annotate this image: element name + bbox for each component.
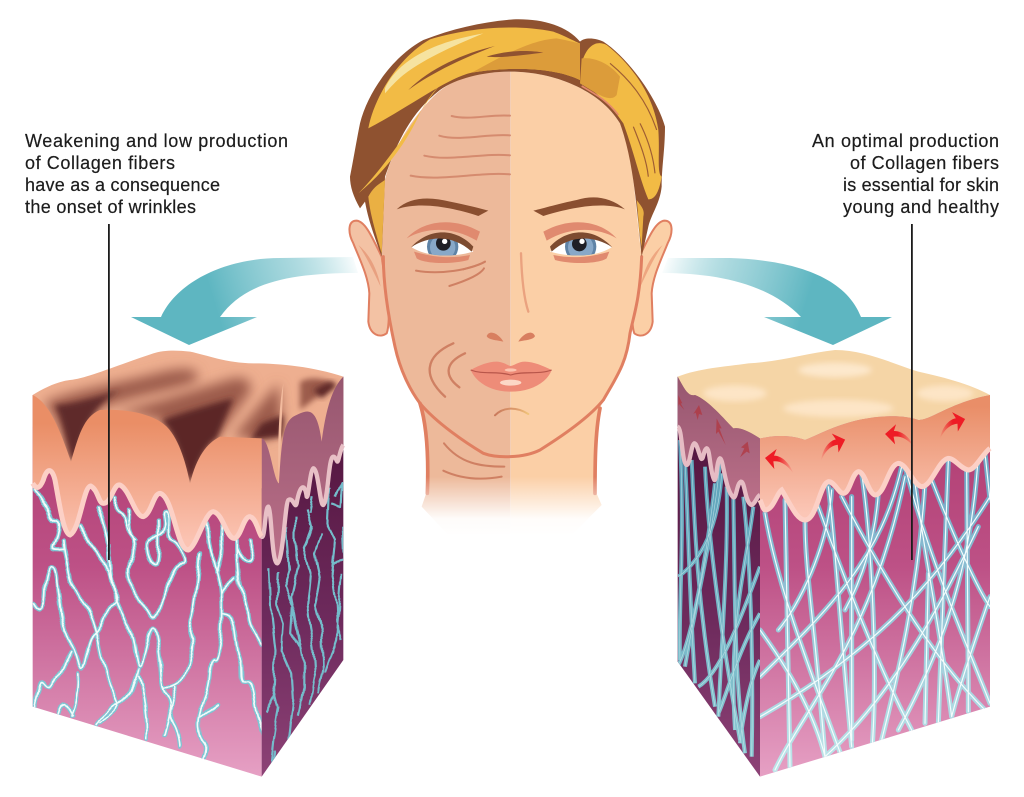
portrait: half aged, half young face <box>349 19 672 537</box>
under-eye and cheek wrinkles <box>416 262 504 479</box>
straight collagen fibers, side face <box>678 440 760 757</box>
side ridge wave <box>678 427 760 505</box>
text block: left caption <box>25 131 288 217</box>
epidermis, side face <box>262 377 343 563</box>
left ear <box>349 221 389 336</box>
face skin, young half <box>511 72 642 533</box>
nostrils <box>487 333 535 342</box>
skin surface with wrinkle folds <box>32 350 344 488</box>
epidermis, front face <box>760 395 990 520</box>
smooth skin surface <box>678 350 990 440</box>
text block: right caption: An optimal production <box>812 131 999 151</box>
right eye <box>543 222 617 263</box>
front dermis <box>760 395 990 777</box>
chin mark <box>495 409 528 415</box>
arrow: left, face to wrinkled skin <box>131 257 358 345</box>
text block: left caption: have as a consequence <box>25 175 220 195</box>
text block: right caption: young and healthy <box>843 197 999 217</box>
straight collagen fibers, front face <box>760 453 990 770</box>
front ridge wave <box>33 471 262 550</box>
epidermis, front face <box>33 395 262 550</box>
red arrows, front <box>765 410 968 473</box>
nose line <box>521 253 528 312</box>
forehead wrinkles <box>411 115 510 178</box>
front dermis <box>33 395 262 777</box>
text block: left caption: of Collagen fibers <box>25 153 175 173</box>
hair <box>350 19 665 257</box>
lips <box>471 362 552 392</box>
text block: left caption: the onset of wrinkles <box>25 197 196 217</box>
left eyebrow <box>397 199 488 216</box>
right eyebrow <box>533 197 625 216</box>
text block: left caption: Weakening and low production <box>25 131 288 151</box>
side dermis <box>262 377 343 777</box>
side ridge wave <box>262 445 343 563</box>
epidermis, side face <box>678 377 760 505</box>
jaw and neck lines <box>383 257 642 493</box>
neck fade <box>407 477 613 537</box>
arrow: right, face to healthy skin <box>662 258 892 345</box>
side dermis <box>678 377 760 777</box>
text block: right caption: of Collagen fibers <box>850 153 999 173</box>
panel: aged skin cube <box>30 347 347 777</box>
left eye <box>407 222 480 263</box>
front ridge wave <box>760 448 990 520</box>
broken collagen fibers, side face <box>267 483 343 770</box>
face skin, aged half <box>382 72 511 533</box>
broken collagen fibers, front face <box>33 490 265 760</box>
red arrows, side <box>678 395 750 457</box>
leader line: left <box>108 224 110 560</box>
text block: right caption <box>812 131 999 217</box>
text block: right caption: is essential for skin <box>843 175 999 195</box>
right ear <box>632 221 672 336</box>
panel: healthy skin cube <box>675 347 992 777</box>
leader line: right <box>911 224 913 560</box>
